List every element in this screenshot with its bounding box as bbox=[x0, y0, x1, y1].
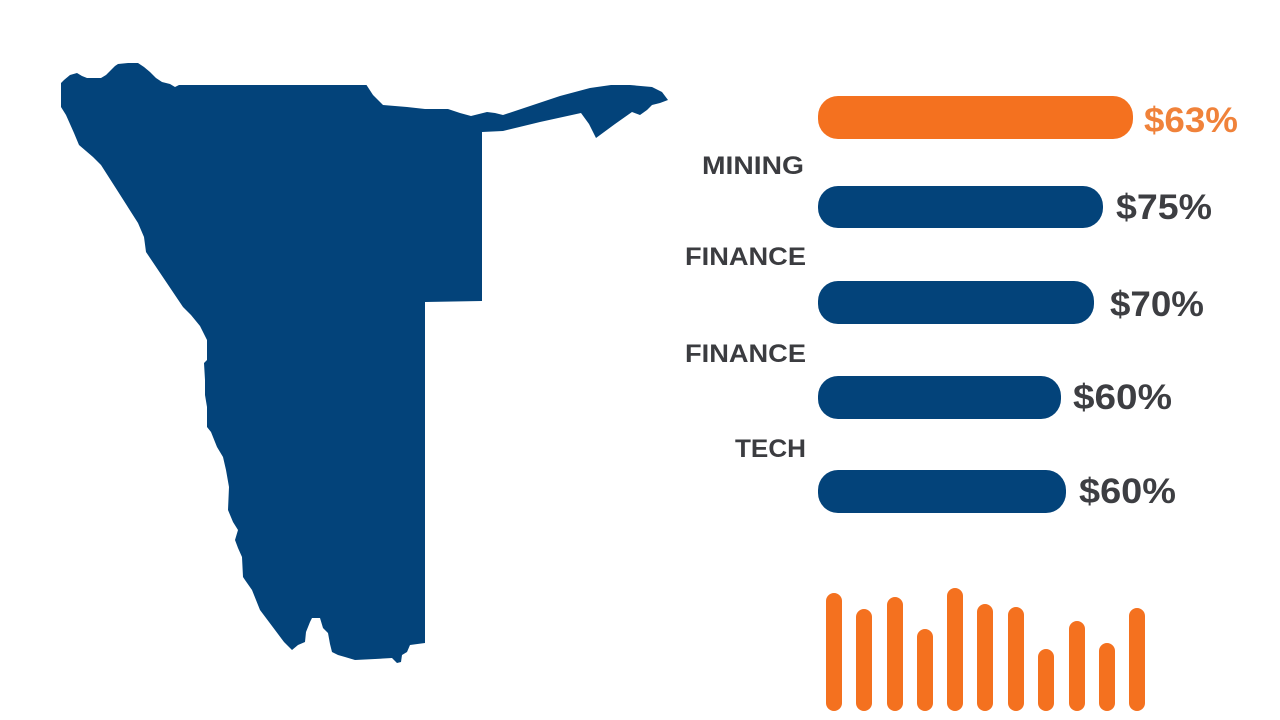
bar: 70 percent bbox=[818, 281, 1204, 324]
bar: 60 percent second bbox=[818, 470, 1176, 513]
bar: 75 percent bbox=[818, 186, 1212, 228]
bar: 70 percent: $70% bbox=[1110, 285, 1204, 324]
bar: 60 percent bbox=[818, 376, 1172, 419]
bar: orange top bbox=[818, 96, 1238, 140]
horizontal bar chart bbox=[685, 96, 1238, 513]
bar: 75 percent: $75% bbox=[1116, 188, 1212, 227]
bar: 60 percent: $60% bbox=[1073, 378, 1172, 417]
map silhouette bbox=[61, 63, 668, 663]
bar: orange top: $63% bbox=[1144, 101, 1238, 140]
label: finance: FINANCE bbox=[685, 243, 806, 271]
label: finance second: FINANCE bbox=[685, 340, 806, 368]
bar: 60 percent second: $60% bbox=[1079, 472, 1176, 511]
label: mining: MINING bbox=[702, 152, 804, 180]
label: tech: TECH bbox=[735, 435, 806, 463]
orange column chart bbox=[826, 588, 1145, 711]
